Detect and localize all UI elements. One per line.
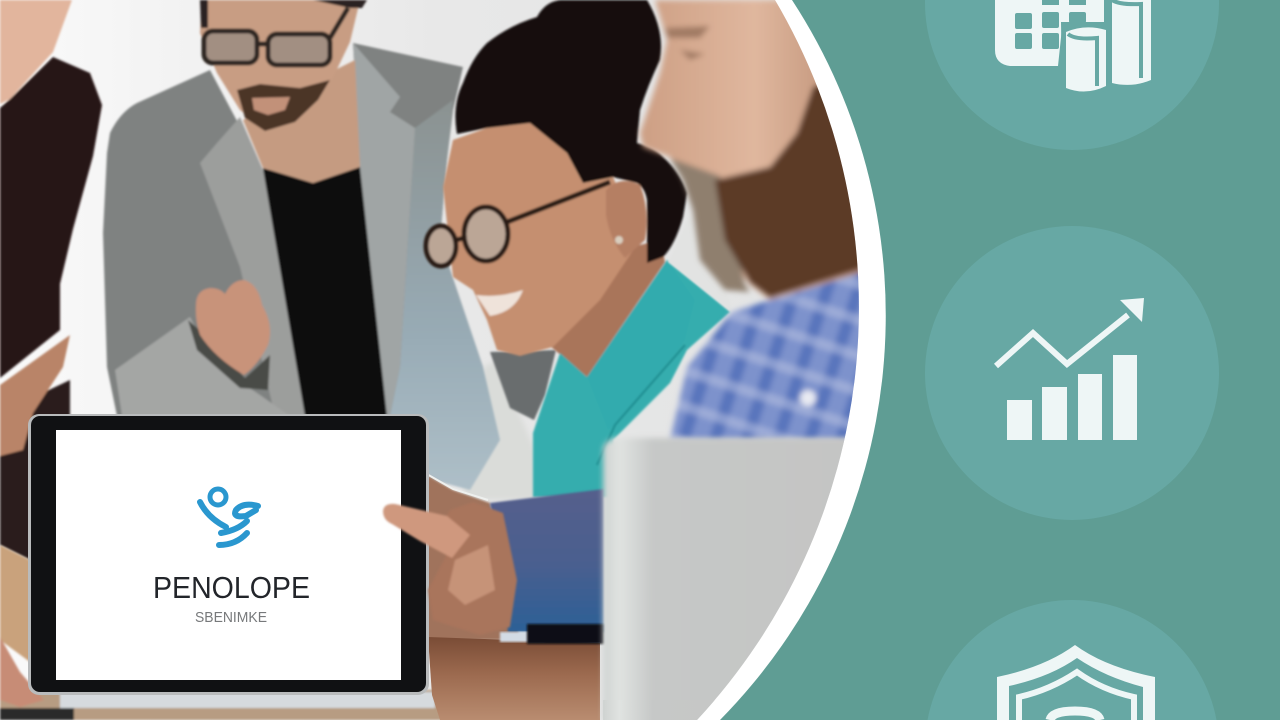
glasses	[426, 182, 610, 266]
hair	[455, 0, 687, 263]
hair	[200, 0, 367, 28]
trend arrow	[996, 315, 1128, 366]
white cuff highlight	[500, 632, 545, 642]
forearm	[428, 637, 600, 720]
photo: team around a tablet	[0, 0, 880, 720]
tablet screen	[56, 430, 401, 680]
icon: building and cylinders	[995, 0, 1154, 94]
beard	[237, 80, 330, 131]
face	[0, 0, 72, 104]
foreground laptop	[603, 438, 880, 720]
white highlight above arm	[425, 473, 488, 500]
laptop lower body	[603, 700, 880, 720]
blazer body	[103, 43, 483, 430]
pale fabric behind woman	[464, 363, 532, 500]
hand	[0, 335, 70, 456]
right jacket panel	[390, 100, 500, 490]
bottom circle badge	[928, 600, 1216, 720]
icon: growth chart	[996, 298, 1144, 440]
face	[640, 0, 870, 300]
middle circle badge	[925, 226, 1219, 520]
glasses	[204, 8, 348, 65]
phone	[0, 708, 74, 720]
ear	[606, 181, 647, 258]
shirt collar	[587, 260, 695, 430]
black shirt	[263, 167, 387, 416]
denim sleeve	[490, 489, 604, 632]
dark gap behind woman	[490, 350, 556, 420]
tablet subtitle: SBENIMKE	[195, 609, 267, 626]
logo mark	[200, 489, 258, 545]
pale gap near beard	[667, 260, 730, 311]
shirt button	[800, 390, 816, 406]
neck	[540, 240, 665, 377]
face	[443, 123, 640, 356]
lower sleeve	[115, 317, 290, 416]
eyebrow	[665, 26, 710, 60]
foreground bearded man	[640, 0, 870, 440]
top circle badge	[925, 0, 1219, 150]
left lapel panel	[200, 117, 305, 416]
earring	[615, 236, 623, 244]
lower left fingers	[0, 637, 44, 707]
tablet edge	[28, 414, 429, 695]
teal shirt	[533, 260, 730, 497]
tablet brand name: PENOLOPE	[153, 570, 310, 605]
plaid shirt	[670, 265, 870, 440]
dark cuff	[527, 624, 604, 644]
tabletop	[0, 545, 470, 720]
smile	[476, 290, 523, 316]
jacket	[0, 57, 102, 378]
left woman	[0, 0, 102, 560]
neck	[243, 60, 360, 183]
trousers	[0, 380, 70, 560]
mouth area	[252, 97, 290, 115]
collar seam	[597, 345, 685, 465]
palm highlight	[448, 545, 495, 605]
icon: shield with lock	[997, 645, 1155, 720]
hand back	[428, 502, 517, 635]
beard	[715, 80, 870, 298]
grey moustache side	[670, 158, 750, 292]
tablet	[28, 414, 429, 695]
table surface	[0, 690, 470, 720]
raised hand	[196, 280, 270, 375]
left table area	[0, 545, 30, 662]
cuff	[188, 320, 270, 390]
head	[198, 0, 360, 113]
central woman	[426, 0, 730, 497]
paper strip	[60, 692, 435, 708]
pointing hand	[383, 502, 517, 635]
index finger	[383, 504, 470, 558]
white arc border	[0, 0, 886, 720]
arm behind tablet	[423, 473, 520, 640]
bars	[1007, 355, 1137, 440]
office wall	[74, 0, 776, 720]
tablet frame	[31, 416, 426, 692]
man in grey blazer	[103, 0, 500, 490]
right lapel	[353, 43, 415, 416]
